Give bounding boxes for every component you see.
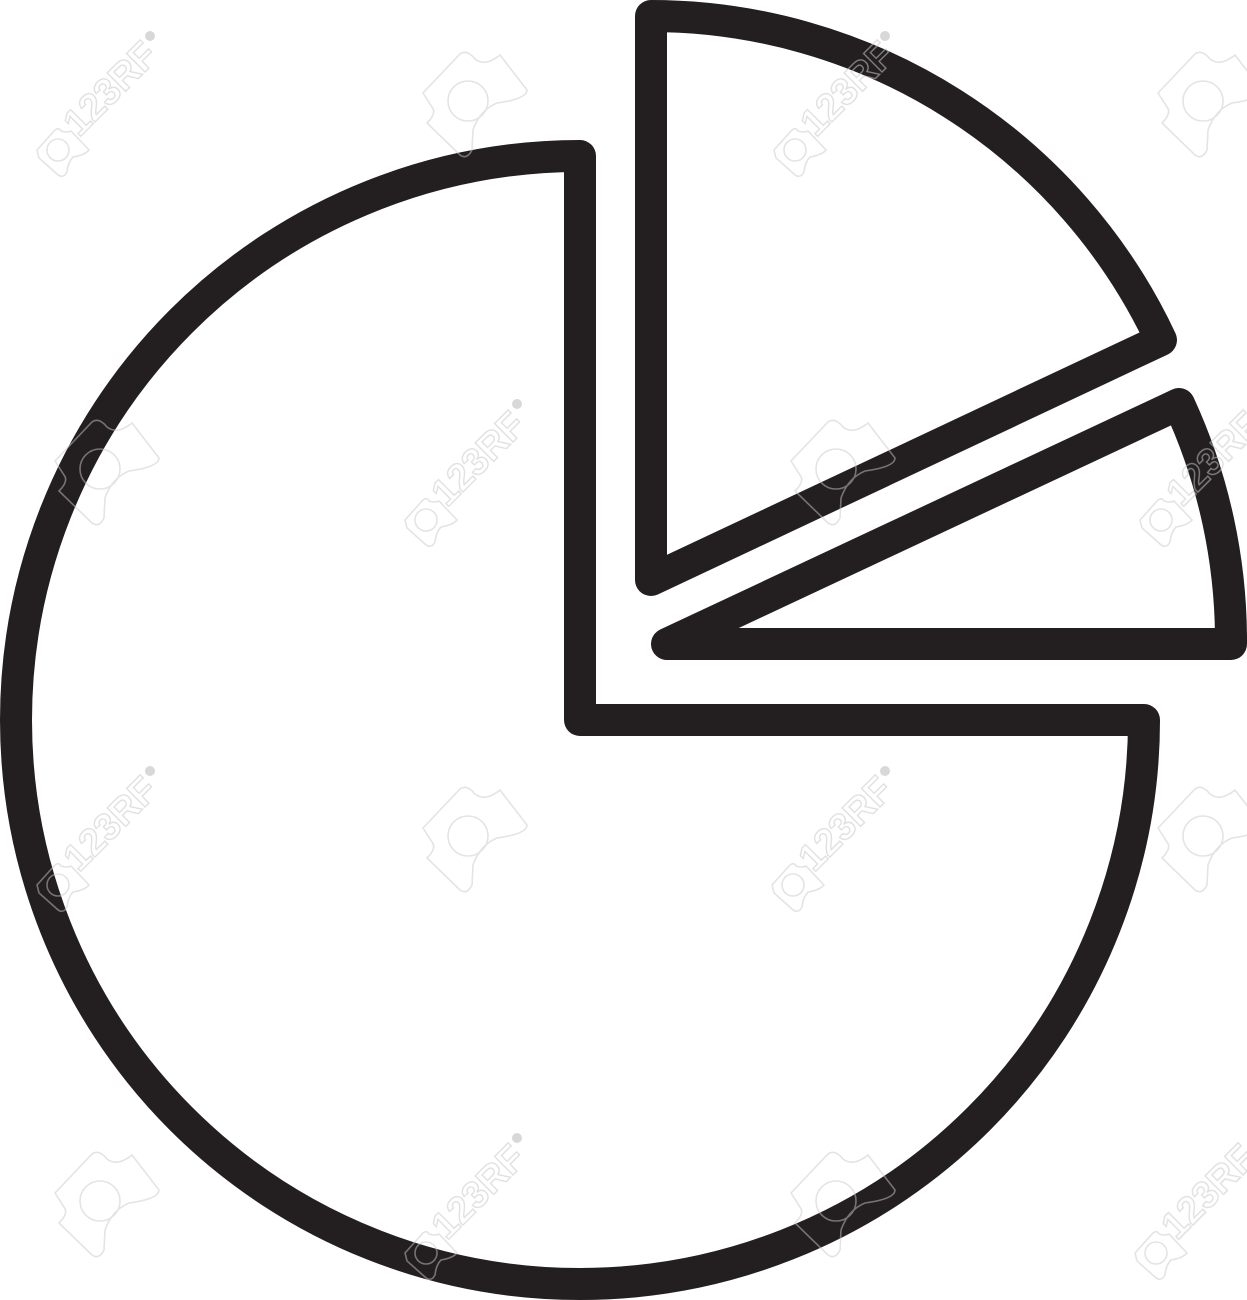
watermark pattern: 123RF [793,34,903,144]
watermark pattern: 123RF [56,34,166,144]
watermark pattern: 123RF [791,769,901,879]
upper right pie slice [651,16,1161,580]
watermark pattern: 123RF [424,1137,534,1247]
watermark pattern: 123RF [424,404,534,514]
main pie slice [16,156,1144,1284]
watermark pattern: 123RF [56,769,166,879]
small right pie slice [667,404,1231,644]
